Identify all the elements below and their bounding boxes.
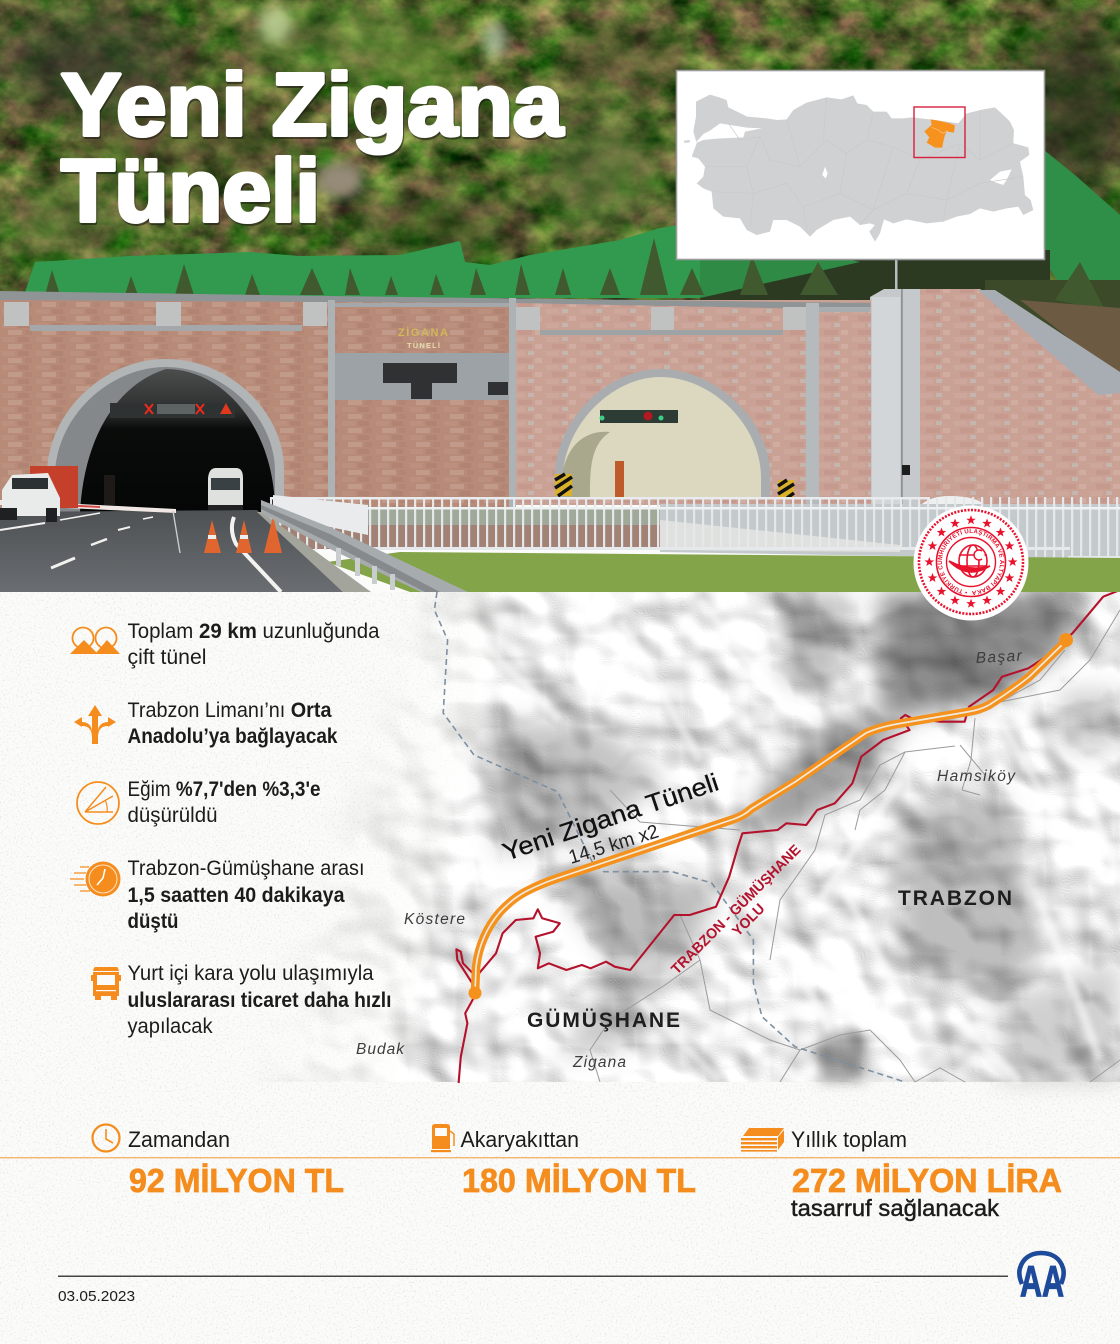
medallions: [4, 302, 806, 330]
map label: Gumushane: GÜMÜŞHANE: [527, 1009, 680, 1032]
feature 1: twin tunnels: çift tünel: [128, 646, 206, 669]
feature 2: connection: [74, 699, 338, 748]
footer rule: [58, 1276, 1008, 1277]
title: [61, 55, 564, 240]
grass: [327, 552, 1120, 592]
text: Yurt içi kara yolu ulaşımıyla: [128, 962, 374, 985]
map label: road name: TRABZON - GÜMÜŞHANE: [668, 841, 805, 978]
map label: Zigana: Zigana: [572, 1054, 627, 1071]
map label: road name second line: YOLU: [730, 901, 768, 940]
map label: Hamsikoy: Hamsiköy: [937, 768, 1016, 785]
map label: Basar: Başar: [975, 648, 1023, 667]
feature 4: time: 1,5 saatten 40 dakikaya: [128, 884, 345, 907]
icon: fuel pump: [431, 1124, 454, 1152]
road markings: [0, 513, 281, 592]
red X signal: [145, 404, 204, 414]
icon: tunnels: [70, 628, 120, 654]
text: Trabzon-Gümüşhane arası: [128, 857, 364, 880]
left tunnel arch: [47, 359, 284, 512]
label: Akaryakıttan: [460, 1127, 579, 1152]
support pole: [895, 258, 898, 292]
feature 5: trade: yapılacak: [128, 1015, 213, 1038]
seal globe: [949, 545, 990, 577]
map label: Kostere: Köstere: [404, 911, 466, 928]
text: Trabzon Limanı’nı Orta: [128, 699, 332, 722]
map label: tunnel length: 14,5 km x2: [566, 821, 661, 869]
icon: clock: [92, 1124, 120, 1152]
saving: fuel: [431, 1124, 696, 1199]
seal stars: [924, 515, 1018, 608]
gold name sign second line: TÜNELİ: [407, 341, 440, 350]
emergency door: [615, 461, 624, 497]
warning signal: [220, 403, 232, 414]
map label: Trabzon: TRABZON: [898, 887, 1012, 910]
highlighted provinces: [924, 119, 955, 148]
white pickup: [0, 473, 60, 522]
chevron posts: [555, 474, 794, 498]
feature 3: slope: düşürüldü: [128, 804, 218, 827]
feature 3: slope: [77, 778, 320, 827]
roadside fence: [270, 497, 1120, 560]
icon: slope gauge: [77, 782, 119, 824]
traffic cones: [204, 516, 282, 553]
photo: tunnel entrance: [0, 0, 1120, 592]
white car: [921, 496, 985, 505]
feature 2: connection: Anadolu’ya bağlayacak: [128, 725, 338, 748]
feature 1: twin tunnels: [70, 620, 380, 669]
road: [0, 510, 343, 592]
map label: Budak: Budak: [356, 1041, 405, 1058]
map label: tunnel name: Yeni Zigana Tüneli: [499, 768, 722, 867]
icon: money stack: [741, 1128, 784, 1152]
barrier: [0, 500, 180, 553]
stone frames: [30, 325, 302, 331]
Turkey outline: [684, 95, 1033, 242]
value: 180 MİLYON TL: [462, 1162, 696, 1199]
AA logo: [1019, 1253, 1064, 1306]
locator map panel: [676, 70, 1044, 260]
red service truck: [30, 466, 78, 508]
map: tunnel route: [475, 642, 1065, 993]
workers: [104, 475, 115, 505]
curb: [257, 512, 371, 592]
map: old Trabzon-Gumushane road: [456, 590, 1120, 1083]
title: Tüneli: [61, 141, 320, 240]
text: Toplam 29 km uzunluğunda: [128, 620, 380, 643]
feature 5: trade: [91, 962, 392, 1038]
green erosion netting: [25, 150, 1120, 400]
top coping: [0, 291, 870, 310]
right tunnel arch: [555, 369, 794, 498]
map: provincial border, dashed: [434, 592, 905, 1082]
icon: fast clock: [70, 862, 120, 896]
map: streams: [590, 610, 1120, 1082]
saving: total: [741, 1127, 1062, 1221]
hillside vegetation: [0, 0, 1120, 300]
title: Yeni Zigana: [61, 55, 564, 154]
AA logo: AA: [1020, 1257, 1064, 1306]
feature 5: trade: uluslararası ticaret daha hızlı: [128, 989, 392, 1012]
feature 4: time: düştü: [128, 910, 178, 933]
value: 92 MİLYON TL: [129, 1162, 344, 1199]
saving: time: [92, 1124, 344, 1199]
ministry seal: [914, 506, 1028, 620]
minibus: [208, 468, 243, 510]
value: 272 MİLYON LİRA: [792, 1162, 1062, 1199]
red locator square: [914, 107, 965, 158]
right wing wall: [870, 289, 1120, 506]
icon: branching arrows: [74, 705, 116, 744]
gold name sign: ZİGANA: [398, 326, 448, 339]
feature 4: time: [70, 857, 364, 933]
portal wall: [0, 291, 871, 511]
map: tunnel end points: [468, 633, 1073, 1000]
text: Eğim %7,7'den %3,3'e: [128, 778, 320, 801]
label: Zamandan: [128, 1127, 230, 1152]
icon: truck: [91, 967, 121, 1000]
note: tasarruf sağlanacak: [791, 1195, 1000, 1221]
guardrail: [261, 495, 468, 592]
seal text: • TÜRKİYE CUMHURİYETİ ULAŞTIRMA VE ALTYAPI BAKANLIĞI: [938, 528, 1004, 596]
label: Yıllık toplam: [791, 1127, 907, 1152]
divider line: [0, 1157, 1120, 1158]
date: 03.05.2023: [58, 1288, 135, 1305]
map panel: shaded relief: [279, 592, 1120, 1092]
zigana slab: [335, 353, 509, 400]
